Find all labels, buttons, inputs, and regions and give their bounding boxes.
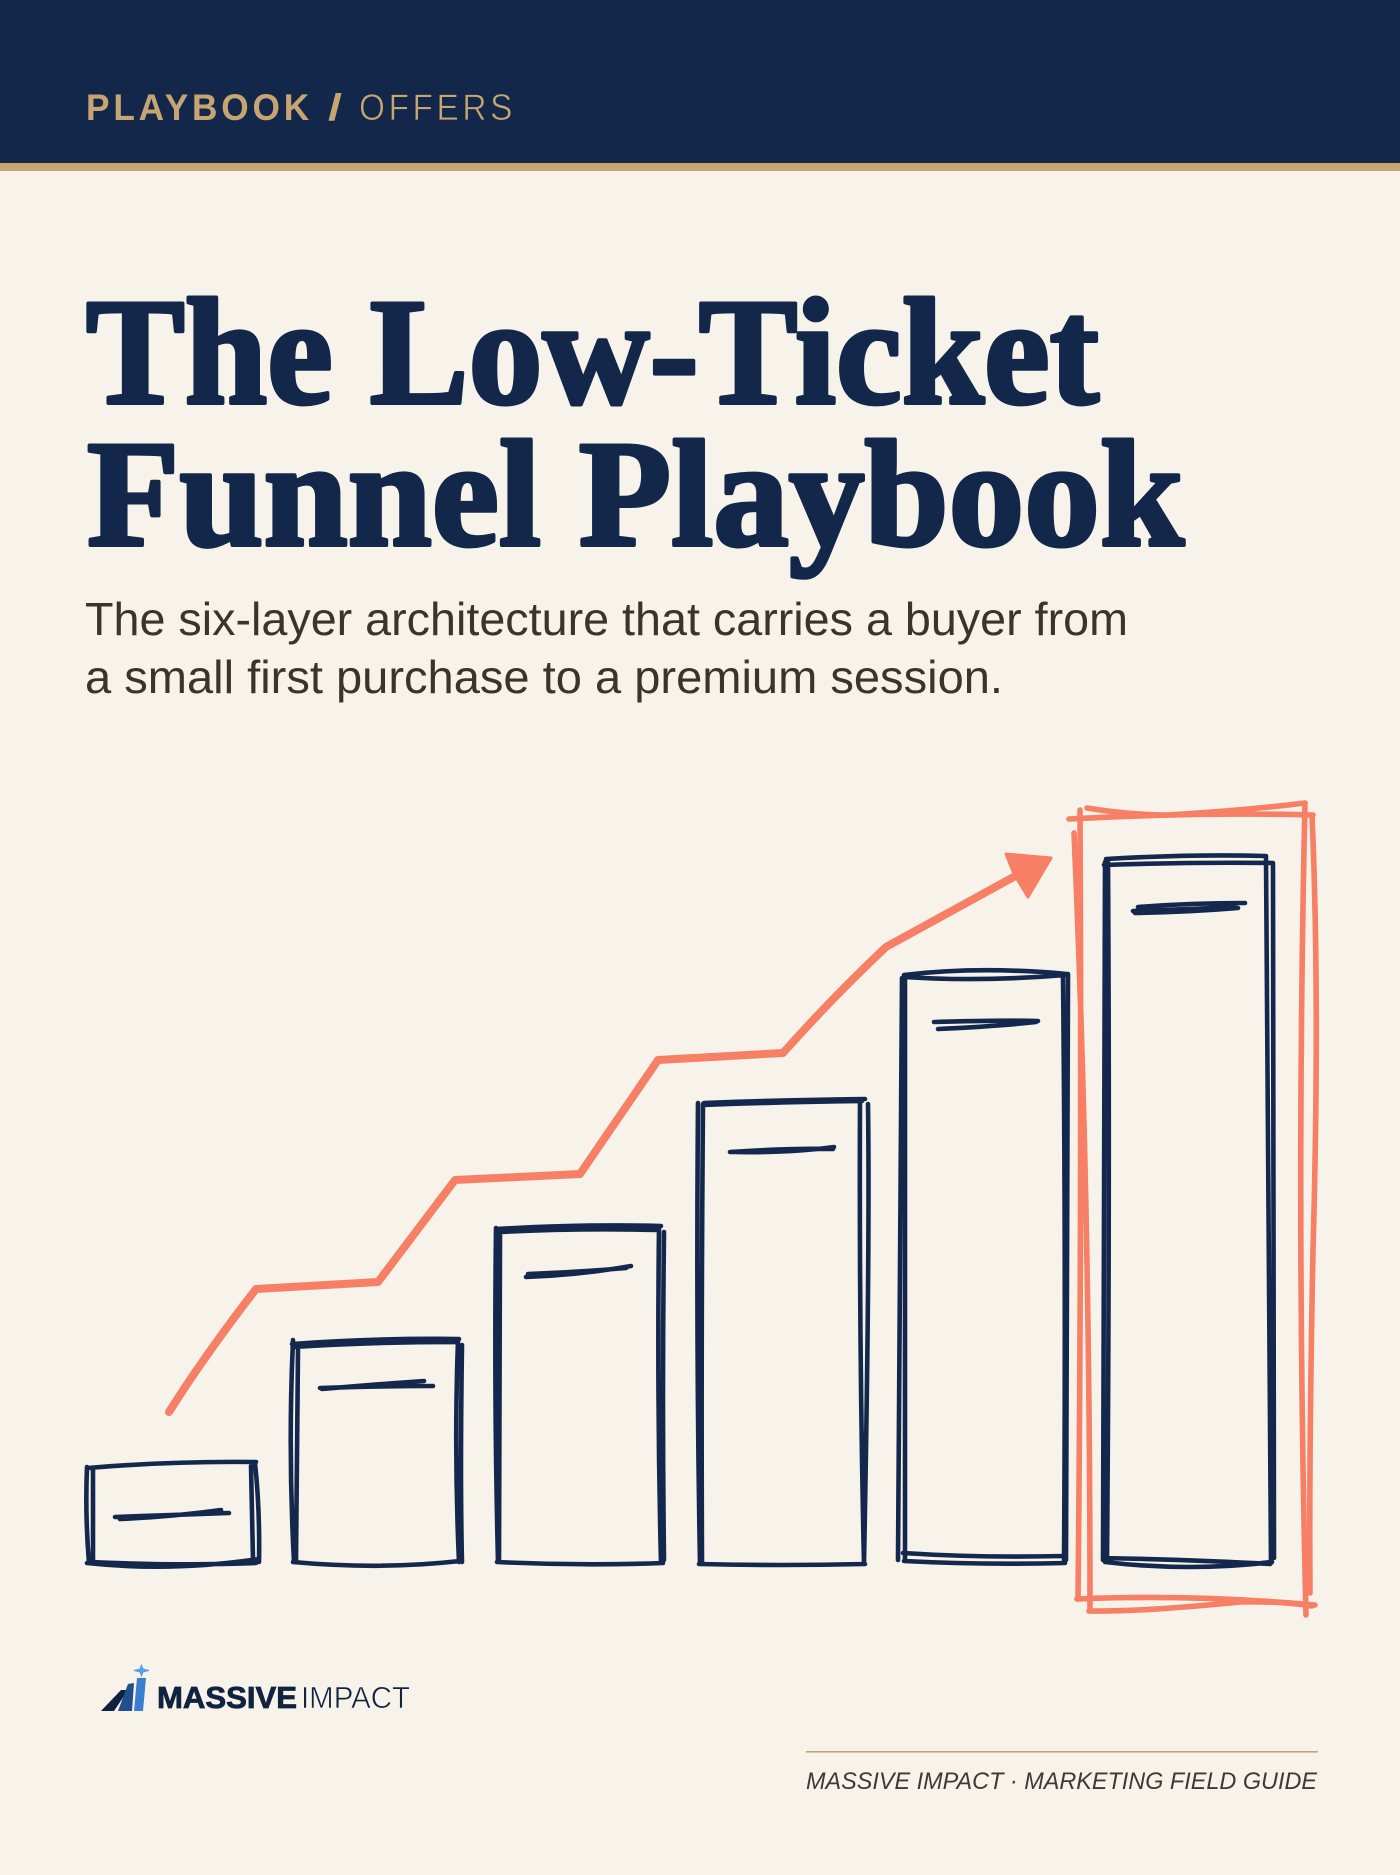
bar 5	[898, 970, 1068, 1564]
subtitle: The six-layer architecture that carries a buyer from	[85, 593, 1128, 645]
header band	[0, 0, 1400, 171]
staircase bar chart	[86, 855, 1274, 1567]
logo wordmark	[157, 1680, 410, 1715]
bar 2	[291, 1339, 462, 1566]
highlight box around final bar	[1069, 803, 1316, 1615]
title: Funnel Playbook	[87, 410, 1184, 578]
logo mark	[101, 1665, 149, 1711]
footer text: MASSIVE IMPACT · MARKETING FIELD GUIDE	[806, 1768, 1318, 1795]
bar 6	[1103, 855, 1274, 1567]
bar 3	[495, 1225, 664, 1564]
logo wordmark: MASSIVE	[157, 1680, 297, 1715]
arrowhead	[1006, 854, 1051, 897]
breadcrumb: playbook / offers	[86, 87, 516, 128]
bar 4	[697, 1099, 868, 1565]
subtitle: a small first purchase to a premium session.	[85, 651, 1003, 703]
bar 1	[86, 1462, 259, 1567]
footer rule	[806, 1751, 1318, 1753]
breadcrumb: playbook / offers: OFFERS	[359, 87, 516, 128]
breadcrumb: playbook / offers: /	[328, 87, 342, 128]
logo wordmark: IMPACT	[301, 1680, 410, 1715]
title	[86, 268, 1184, 578]
title: The Low-Ticket	[86, 268, 1099, 436]
logo: Massive Impact	[101, 1665, 410, 1715]
rising arrow	[169, 854, 1051, 1412]
subtitle	[85, 593, 1128, 703]
breadcrumb: playbook / offers: PLAYBOOK	[86, 87, 313, 128]
